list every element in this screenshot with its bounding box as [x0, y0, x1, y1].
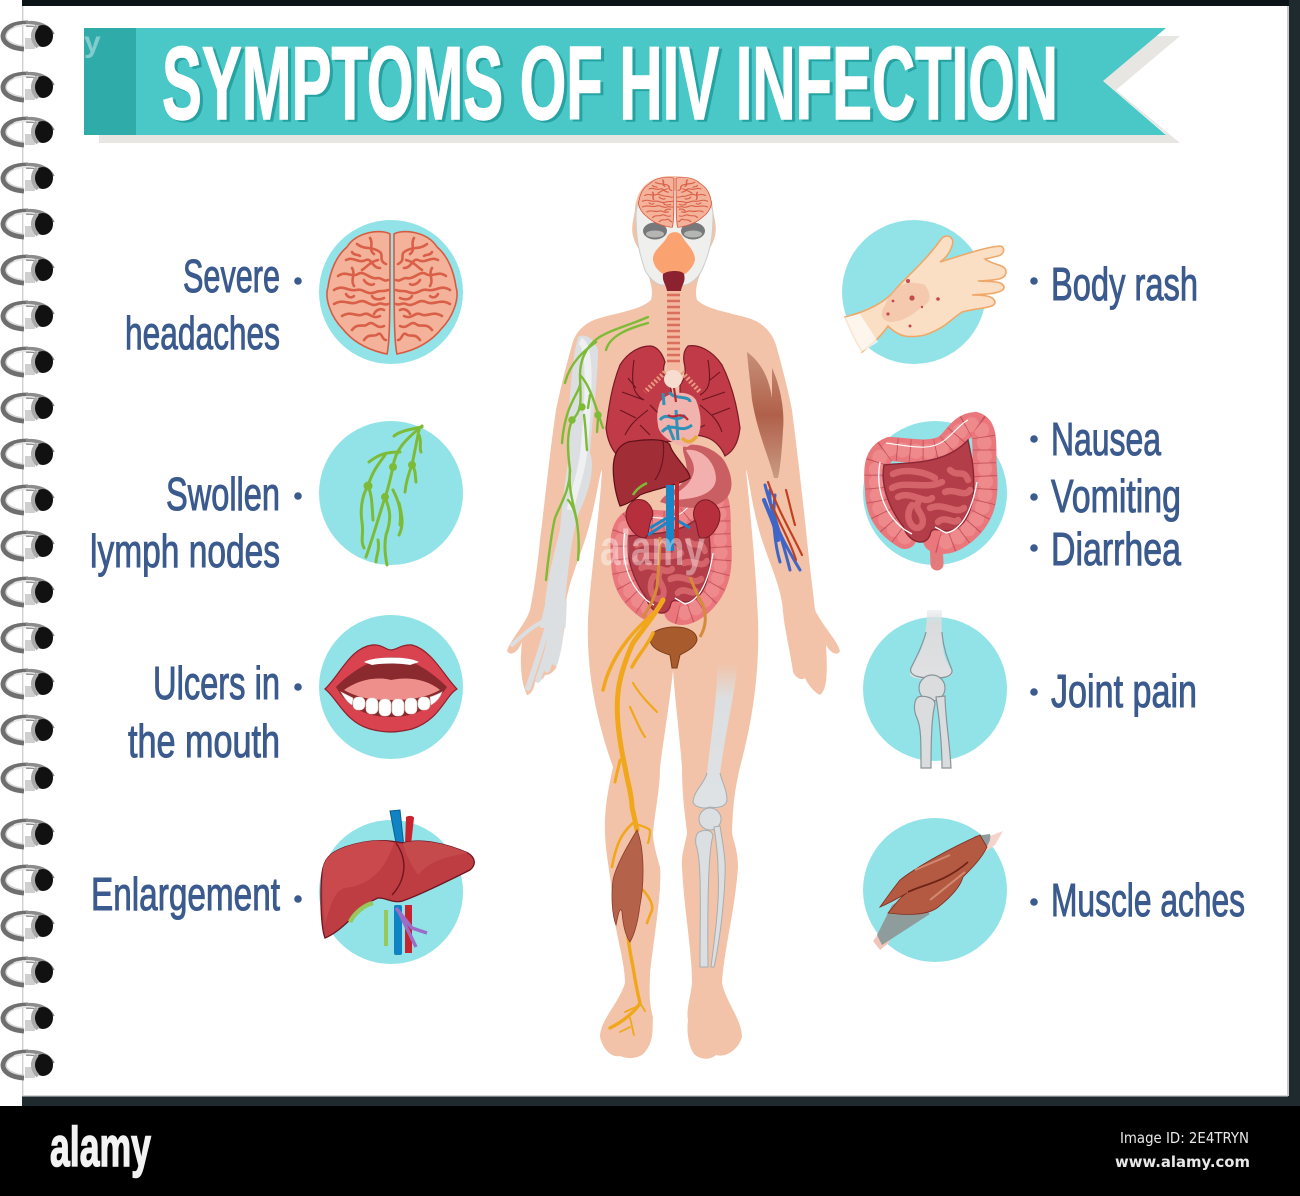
watermark text: y	[84, 26, 101, 59]
right arm blood vessels	[764, 482, 802, 570]
ureter nerves in lower torso	[643, 537, 705, 637]
alamy logo: alamy	[50, 1115, 151, 1178]
footer bar	[0, 1106, 1300, 1196]
symptom: severe headaches: Severe	[183, 250, 280, 302]
symptom: nausea, vomiting, diarrhea	[863, 413, 1181, 575]
symptom: swollen lymph nodes: lymph nodes	[90, 525, 280, 577]
left arm bone	[545, 335, 598, 603]
heart	[657, 388, 701, 447]
symptom: muscle aches	[863, 818, 1245, 962]
symptom: ulcers in the mouth: the mouth	[128, 715, 280, 767]
body silhouette	[507, 176, 840, 1059]
liver in body	[613, 440, 690, 506]
skull	[636, 190, 713, 285]
right column symptoms	[842, 220, 1245, 962]
right leg bone	[693, 663, 738, 967]
symptom: severe headaches	[125, 220, 463, 364]
symptom: joint pain	[863, 610, 1197, 768]
symptom: swollen lymph nodes: Swollen	[166, 468, 280, 520]
sciatic nerve	[603, 600, 663, 1035]
lungs	[606, 346, 740, 456]
symptom: severe headaches: headaches	[125, 307, 280, 359]
trachea	[645, 290, 700, 392]
symptom: enlargement of the liver	[91, 810, 474, 964]
watermark text: alamy	[600, 520, 705, 576]
kidneys and renal vessels	[626, 482, 720, 551]
symptom: nausea, vomiting, diarrhea: Nausea	[1051, 413, 1161, 465]
nasal cavity	[653, 232, 695, 291]
symptom: joint pain: Joint pain	[1051, 665, 1197, 717]
left column symptoms	[90, 220, 474, 964]
right arm muscle	[747, 352, 783, 478]
left hand skeleton	[512, 604, 564, 688]
image id: Image ID: 2E4TRYN	[1120, 1129, 1249, 1147]
human anatomy figure	[84, 26, 840, 1059]
symptom: body rash: Body rash	[1051, 258, 1198, 310]
symptom: ulcers in the mouth: Ulcers in	[153, 657, 280, 709]
symptom: nausea, vomiting, diarrhea: Vomiting	[1051, 470, 1181, 522]
brain in body	[639, 177, 711, 227]
bladder	[650, 627, 697, 668]
watermark text	[84, 26, 705, 576]
website: www.alamy.com	[1115, 1153, 1250, 1171]
symptom: nausea, vomiting, diarrhea: Diarrhea	[1051, 523, 1181, 575]
symptom: enlargement of the liver: Enlargement	[91, 868, 280, 920]
lymph vessels on arm	[546, 317, 648, 580]
title ribbon	[84, 26, 1180, 144]
symptom: ulcers in the mouth	[128, 615, 463, 767]
leg muscle	[612, 830, 643, 942]
symptom: swollen lymph nodes	[90, 421, 463, 577]
spiral binding rings	[3, 23, 53, 1078]
symptom: body rash	[842, 220, 1198, 364]
stomach	[660, 445, 731, 508]
intestines	[621, 491, 721, 613]
